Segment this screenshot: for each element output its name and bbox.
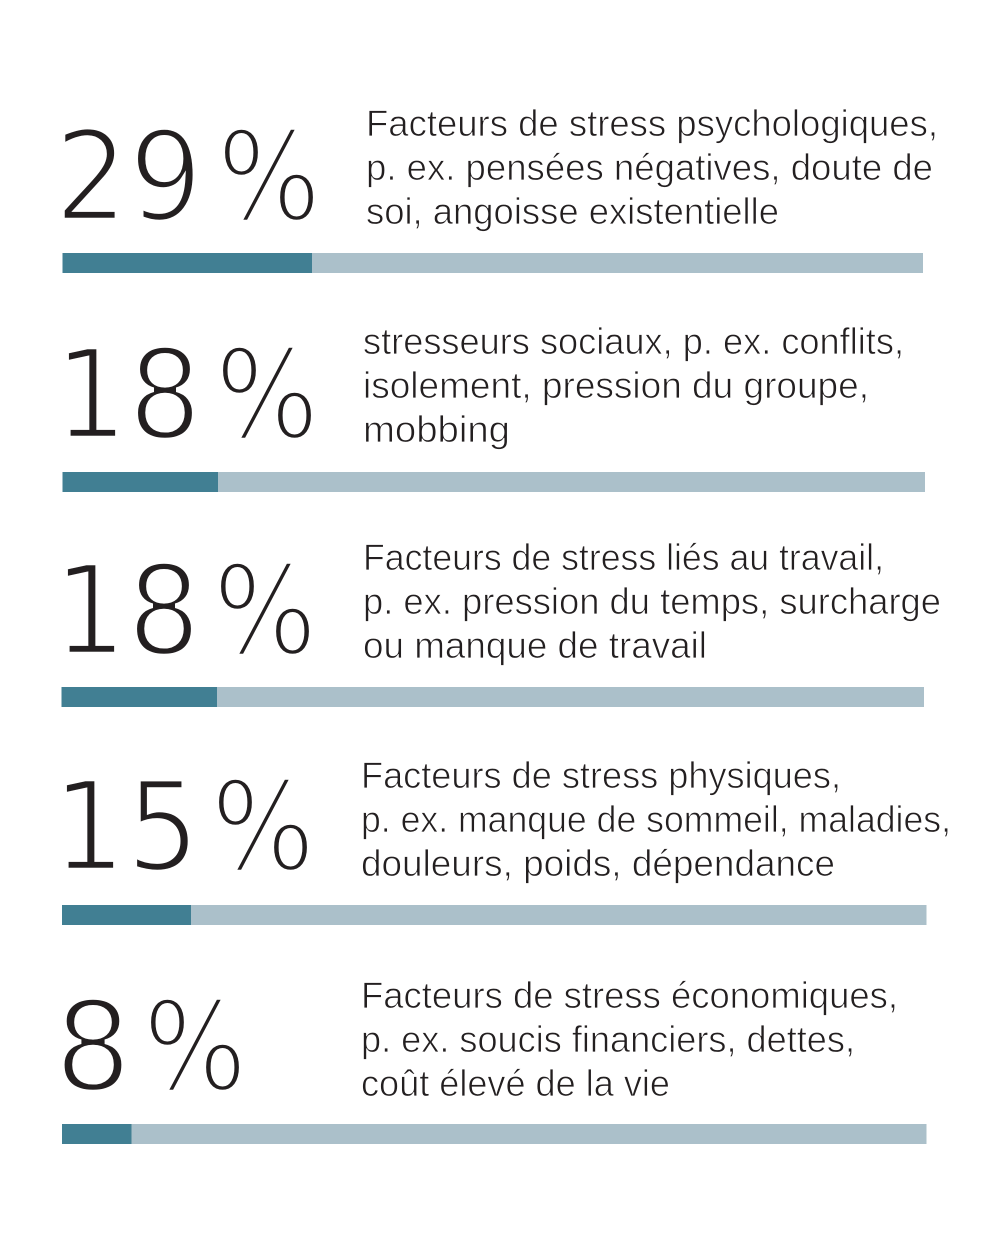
description: economic: Facteurs de stress économiques, (361, 974, 898, 1016)
value: 18 % (54, 323, 319, 468)
bar: 29 % (62, 253, 923, 273)
description: physical: douleurs, poids, dépendance (361, 842, 835, 884)
value: 18 %: % (213, 539, 317, 684)
value: 15 %: % (211, 755, 315, 900)
row: 15 % physical stressors (52, 754, 951, 925)
description: work: Facteurs de stress liés au travail, (363, 536, 884, 578)
row: 18 % work stressors (53, 536, 941, 707)
description: psychological: p. ex. pensées négatives, doute de (366, 146, 933, 188)
description: social: isolement, pression du groupe, (363, 364, 869, 406)
bar: 18 % (62, 472, 925, 492)
description: economic: coût élevé de la vie (361, 1062, 670, 1104)
description: social (363, 320, 904, 450)
description: psychological (366, 102, 938, 232)
value: 8 %: 8 (54, 975, 132, 1120)
row: 18 % social stressors (54, 320, 925, 492)
value: 29 %: 29 (54, 105, 203, 250)
bar: 18 % (62, 687, 924, 707)
value: 18 %: 18 (54, 323, 202, 468)
description: work: ou manque de travail (363, 624, 707, 666)
description: psychological: Facteurs de stress psychologiques, (366, 102, 938, 144)
bar: 15 % (62, 905, 926, 925)
value: 8 % (54, 975, 247, 1120)
value: 29 %: % (217, 105, 321, 250)
value: 8 %: % (143, 975, 247, 1120)
value: 18 %: % (215, 323, 319, 468)
description: work: p. ex. pression du temps, surcharge (363, 580, 941, 622)
description: social: mobbing (363, 408, 510, 450)
description: work (363, 536, 941, 666)
value: 18 %: 18 (53, 539, 201, 684)
description: economic (361, 974, 898, 1104)
row: 29 % psychological stressors (54, 102, 938, 273)
value: 15 % (52, 755, 315, 900)
row: 8 % economic stressors (54, 974, 926, 1144)
description: physical: Facteurs de stress physiques, (361, 754, 841, 796)
description: social: stresseurs sociaux, p. ex. conflits, (363, 320, 904, 362)
value: 29 % (54, 105, 321, 250)
bar: 8 % (62, 1124, 926, 1144)
description: physical: p. ex. manque de sommeil, maladies, (361, 798, 951, 840)
description: physical (361, 754, 951, 884)
description: psychological: soi, angoisse existentielle (366, 190, 779, 232)
value: 15 %: 15 (52, 755, 200, 900)
description: economic: p. ex. soucis financiers, dettes, (361, 1018, 855, 1060)
value: 18 % (53, 539, 317, 684)
